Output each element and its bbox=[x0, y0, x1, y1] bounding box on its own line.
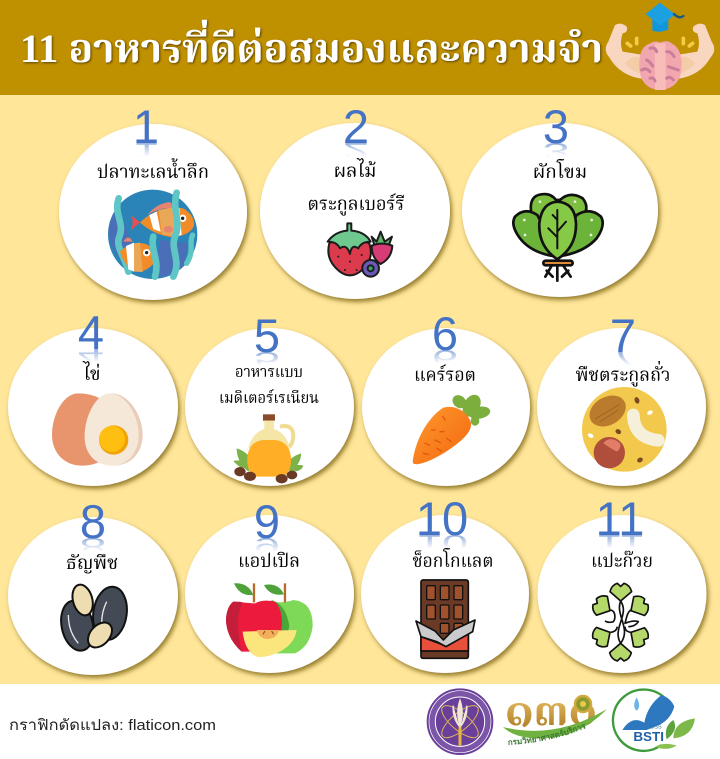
panel: item 8 grains bbox=[8, 495, 178, 675]
icon: spinach bbox=[513, 194, 603, 281]
number 3: 3 bbox=[543, 100, 569, 153]
label 2: ผลไม้ bbox=[334, 157, 376, 182]
footer background bbox=[0, 684, 720, 759]
number 3: 3 bbox=[543, 138, 569, 165]
icon: strawberry and berries bbox=[328, 223, 392, 277]
label 9: แอปเปิล bbox=[238, 551, 300, 572]
label 8: ธัญพืช bbox=[66, 553, 118, 574]
panel: item 2 berries bbox=[260, 100, 450, 299]
panel: item 3 spinach bbox=[462, 100, 658, 297]
number 7: 7 bbox=[610, 309, 636, 362]
circle 2 bbox=[260, 123, 450, 299]
icon: chocolate bar bbox=[416, 580, 475, 658]
label 3: ผักโขม bbox=[533, 157, 587, 183]
label 5: เมดิเตอร์เรเนียน bbox=[219, 388, 319, 407]
logo: DSS BSTI: BSTI bbox=[633, 730, 664, 744]
circle 9 bbox=[185, 515, 354, 673]
logo: 130 years anniversary: กรมวิทยาศาสตร์บริการ bbox=[508, 724, 586, 746]
number 8: 8 bbox=[80, 533, 106, 560]
number 5: 5 bbox=[254, 309, 280, 362]
logo: 130 years anniversary: ๑๓๐ bbox=[505, 684, 597, 736]
icon: nuts bbox=[582, 387, 667, 472]
panel: item 10 chocolate bbox=[361, 492, 529, 673]
footer credit text: กราฟิกดัดแปลง: flaticon.com bbox=[9, 717, 216, 734]
number 1: 1 bbox=[133, 100, 159, 153]
circle 8 bbox=[8, 517, 178, 675]
number 2: 2 bbox=[343, 100, 369, 153]
panel: item 9 apples bbox=[185, 495, 354, 673]
circle 4 bbox=[8, 328, 178, 486]
label 5 bbox=[219, 364, 319, 407]
page background bbox=[0, 95, 720, 684]
number 11: 11 bbox=[596, 530, 644, 557]
panel: item 11 ginkgo bbox=[538, 492, 706, 673]
number 11: 11 bbox=[596, 492, 644, 545]
header band bbox=[0, 0, 720, 95]
number 8: 8 bbox=[80, 495, 106, 548]
label 1: ปลาทะเลน้ำลึก bbox=[97, 157, 209, 183]
label 10: ช็อกโกแลต bbox=[412, 546, 494, 572]
icon: brain with muscles and graduation cap bbox=[606, 3, 714, 90]
circle 1 bbox=[59, 124, 247, 300]
circle 11 bbox=[538, 515, 706, 673]
number 9: 9 bbox=[254, 533, 280, 560]
icon: ginkgo leaves bbox=[589, 583, 652, 661]
label 4: ไข่ bbox=[82, 360, 101, 385]
label 7: พืชตระกูลถั่ว bbox=[576, 360, 670, 387]
number 5: 5 bbox=[254, 347, 280, 374]
circle 7 bbox=[537, 328, 706, 486]
number 6: 6 bbox=[432, 345, 458, 372]
number 4: 4 bbox=[78, 306, 104, 359]
number 6: 6 bbox=[432, 307, 458, 360]
icon: egg bbox=[52, 393, 143, 466]
logo: purple emblem bbox=[428, 689, 492, 754]
icon: sunflower seeds bbox=[57, 582, 130, 654]
label 2 bbox=[308, 157, 405, 216]
label 6: แคร์รอต bbox=[414, 363, 476, 386]
panel: item 6 carrot bbox=[362, 307, 530, 486]
label 11: แปะก๊วย bbox=[591, 550, 653, 572]
number 4: 4 bbox=[78, 344, 104, 371]
icon: carrot bbox=[413, 392, 491, 464]
icon: olive oil bottle bbox=[233, 414, 303, 483]
circle 6 bbox=[362, 328, 530, 486]
panel: item 4 eggs bbox=[8, 306, 178, 486]
title: 11 อาหารที่ดีต่อสมองและความจำ bbox=[20, 19, 603, 71]
circle 10 bbox=[361, 515, 529, 673]
number 10: 10 bbox=[416, 530, 468, 557]
icon: apples bbox=[226, 583, 313, 657]
logo: DSS BSTI: DSS bbox=[650, 725, 662, 731]
number 1: 1 bbox=[133, 138, 159, 165]
number 2: 2 bbox=[343, 138, 369, 165]
number 7: 7 bbox=[610, 347, 636, 374]
label 2: ตระกูลเบอร์รี bbox=[308, 192, 405, 216]
label 5: อาหารแบบ bbox=[235, 364, 303, 381]
logo: DSS BSTI bbox=[613, 690, 695, 751]
panel: item 1 deep sea fish bbox=[59, 100, 247, 300]
number 9: 9 bbox=[254, 495, 280, 548]
circle 3 bbox=[462, 123, 658, 297]
panel: item 5 mediterranean food bbox=[185, 309, 354, 486]
icon: fish bbox=[108, 190, 197, 279]
circle 5 bbox=[185, 328, 354, 486]
number 10: 10 bbox=[416, 492, 468, 545]
panel: item 7 nuts bbox=[537, 309, 706, 486]
